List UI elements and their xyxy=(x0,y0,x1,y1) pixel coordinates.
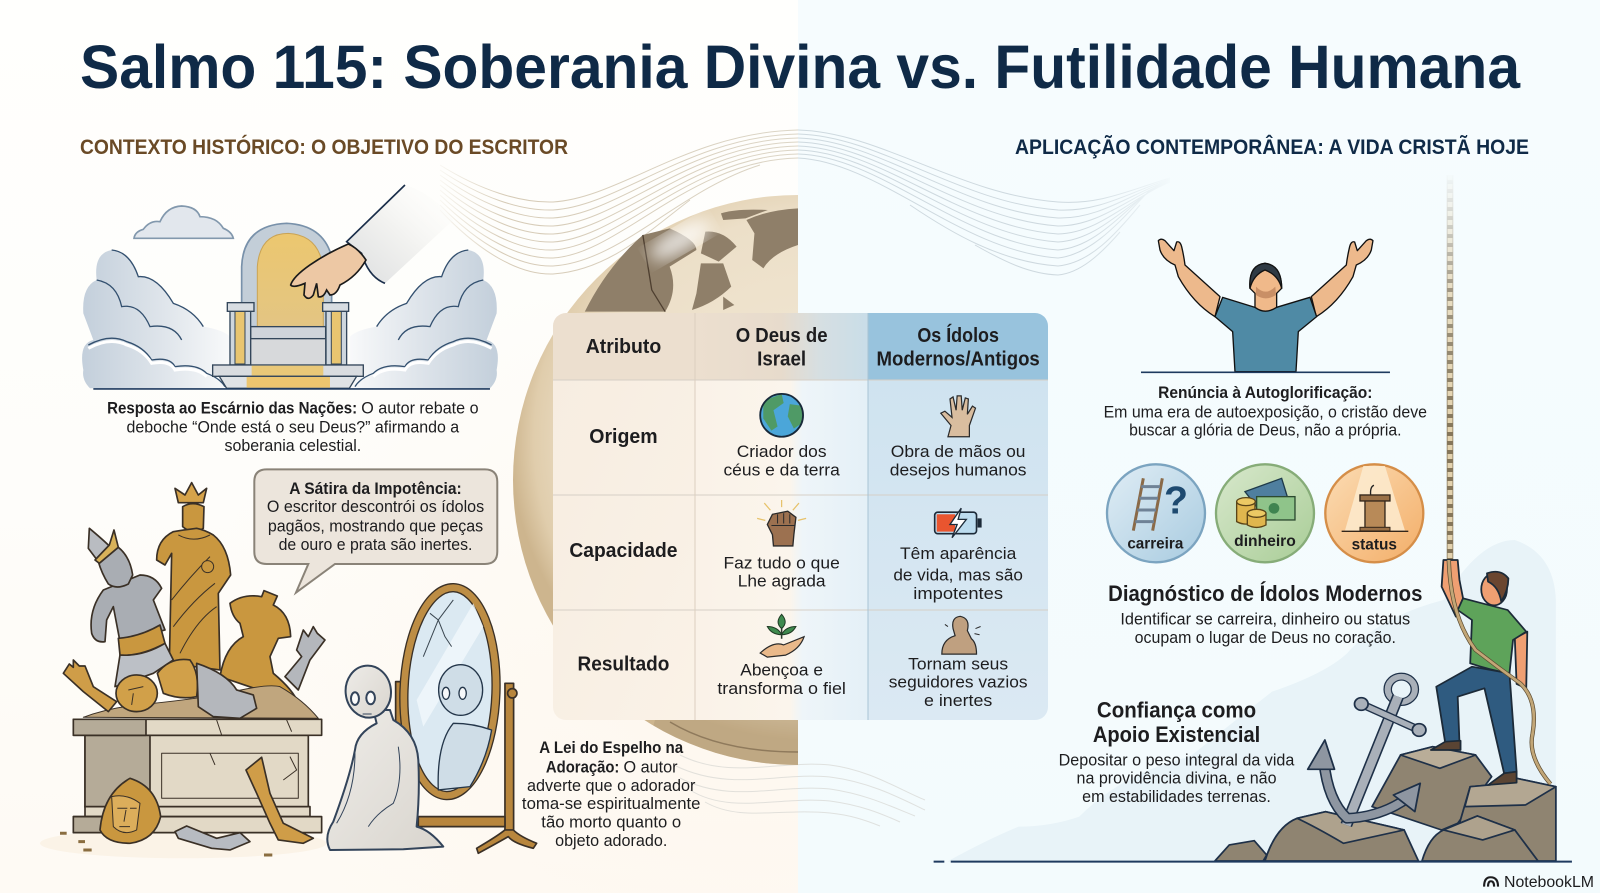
icon: idol hand xyxy=(941,396,976,437)
text: resposta ao escarnio: deboche “Onde está o seu Deus?” afirmando a xyxy=(127,419,460,437)
bubble text: O escritor descontrói os ídolos xyxy=(267,498,484,516)
left arm xyxy=(1158,239,1220,317)
comparison table: desejos humanos xyxy=(890,462,1027,480)
headless gold torso xyxy=(220,591,298,703)
circle: carreira: carreira xyxy=(1127,535,1184,552)
throne xyxy=(213,223,363,388)
globe lower shading xyxy=(654,720,798,765)
comparison table: Obra de mãos ou xyxy=(891,443,1026,461)
icon: low battery xyxy=(935,508,982,538)
circle: dinheiro xyxy=(1216,464,1314,562)
head and neck xyxy=(1250,263,1282,311)
text: diagnostico de idolos modernos: ocupam o lugar de Deus no coração. xyxy=(1135,629,1396,647)
comparison table xyxy=(553,313,1048,720)
globe continents xyxy=(585,208,798,312)
circle: dinheiro: dinheiro xyxy=(1234,533,1296,550)
text: confianca como apoio existencial: em estabilidades terrenas. xyxy=(1082,788,1271,806)
text: lei do espelho: objeto adorado. xyxy=(555,832,667,850)
text: lei do espelho xyxy=(522,739,701,850)
comparison table: Criador dos xyxy=(737,443,827,461)
comparison table: impotentes xyxy=(913,585,1003,603)
ground shadow xyxy=(40,828,327,858)
text: confianca como apoio existencial: Apoio Existencial xyxy=(1093,722,1260,747)
fallen gold arm xyxy=(246,757,313,843)
right clouds xyxy=(350,250,498,388)
rope xyxy=(1447,175,1453,570)
table header: deus de israel: O Deus de xyxy=(736,325,828,347)
mirror frame and glass xyxy=(400,586,500,797)
comparison table: Faz tudo o que xyxy=(723,554,840,572)
text: lei do espelho: toma-se espiritualmente xyxy=(522,795,701,813)
text: renuncia a autoglorificacao: buscar a glória de Deus, não a própria. xyxy=(1129,422,1402,440)
silver statue xyxy=(88,528,173,687)
table header: idolos: Modernos/Antigos xyxy=(877,348,1040,370)
table header: atributo: Atributo xyxy=(586,336,661,358)
silver arm right xyxy=(285,627,325,690)
text: resposta ao escarnio: O autor rebate o xyxy=(361,399,479,417)
text: renuncia a autoglorificacao xyxy=(1104,384,1427,440)
climber xyxy=(1431,560,1527,785)
fallen statue xyxy=(116,659,257,718)
background: cool right half xyxy=(798,0,1600,893)
icon: earth xyxy=(760,394,806,437)
comparison table: seguidores vazios xyxy=(889,674,1028,692)
text: renuncia a autoglorificacao: Renúncia à Autoglorificação: xyxy=(1158,384,1372,402)
comparison table: Têm aparência xyxy=(900,545,1017,563)
right arm xyxy=(1311,239,1373,317)
rocks xyxy=(1215,747,1556,861)
icon: plant in hand xyxy=(760,614,804,657)
globe half xyxy=(513,195,798,765)
comparison table: Lhe agrada xyxy=(738,573,826,591)
text: confianca como apoio existencial: na providência divina, e não xyxy=(1077,770,1277,788)
background blob: pale blue hill xyxy=(947,540,1556,862)
speech bubble: a satira da impotencia xyxy=(254,469,497,593)
ground line xyxy=(951,859,1572,865)
comparison table: de vida, mas são xyxy=(893,567,1023,585)
small cloud xyxy=(134,206,233,238)
shirt xyxy=(1215,297,1317,372)
reflection figure xyxy=(438,665,492,790)
comparison table: céus e da terra xyxy=(723,462,841,480)
illustration: mirror and kneeling figure xyxy=(327,586,537,853)
fallen head on floor xyxy=(100,778,161,843)
background: peach glow xyxy=(0,300,798,893)
rubble pebbles xyxy=(60,833,272,855)
text: confianca como apoio existencial xyxy=(1059,697,1295,806)
gold arm left xyxy=(63,660,117,712)
rubble mound xyxy=(83,686,318,718)
background: warm left half xyxy=(0,0,798,893)
text: lei do espelho: A Lei do Espelho na xyxy=(539,739,684,757)
decorative waves left xyxy=(440,130,798,274)
logo: NotebookLM: NotebookLM xyxy=(1504,874,1594,891)
hair xyxy=(1250,263,1282,288)
table cell backgrounds xyxy=(553,313,1048,720)
text: lei do espelho: O autor xyxy=(623,758,678,776)
bubble text: A Sátira da Impotência: xyxy=(289,480,462,498)
standing gold statue xyxy=(157,483,231,670)
ground dash xyxy=(934,859,944,865)
row label: capacidade: Capacidade xyxy=(569,540,678,562)
hand and sleeve xyxy=(291,185,453,298)
text: diagnostico de idolos modernos: Diagnóstico de Ídolos Modernos xyxy=(1108,581,1422,606)
heading: left column: CONTEXTO HISTÓRICO: O OBJETIVO DO ESCRITOR xyxy=(80,135,568,159)
text: renuncia a autoglorificacao: Em uma era de autoexposição, o cristão deve xyxy=(1104,403,1427,421)
bubble text: pagãos, mostrando que peças xyxy=(268,518,483,536)
icon: raised fist xyxy=(757,500,806,546)
row label: resultado: Resultado xyxy=(578,653,669,675)
mirror stand xyxy=(396,682,537,853)
plinth xyxy=(73,719,322,833)
comparison table: transforma o fiel xyxy=(717,680,846,698)
circle: status xyxy=(1325,464,1423,562)
circle: status: status xyxy=(1352,536,1397,553)
decorative waves bottom xyxy=(676,755,925,826)
globe highlight xyxy=(645,213,715,267)
table header: deus de israel: Israel xyxy=(757,348,806,370)
table header: deus de israel xyxy=(736,325,828,370)
ground line xyxy=(1141,370,1390,375)
text: diagnostico de idolos modernos: Identificar se carreira, dinheiro ou status xyxy=(1120,610,1410,628)
text: lei do espelho: tão morto quanto o xyxy=(541,814,681,832)
comparison table: Abençoa e xyxy=(740,662,823,680)
bubble text: de ouro e prata são inertes. xyxy=(279,536,472,554)
heading: right column: APLICAÇÃO CONTEMPORÂNEA: A VIDA CRISTÃ HOJE xyxy=(1015,135,1529,159)
rope around climber xyxy=(1449,560,1551,784)
decorative waves right xyxy=(798,130,1170,275)
comparison table: e inertes xyxy=(924,692,992,710)
text: confianca como apoio existencial: Confiança como xyxy=(1097,697,1256,722)
table header: idolos xyxy=(877,324,1040,370)
text: confianca como apoio existencial: Depositar o peso integral da vida xyxy=(1059,751,1295,769)
text: resposta ao escarnio xyxy=(107,399,479,455)
kneeling figure xyxy=(327,663,443,850)
illustration: man with raised arms xyxy=(1141,239,1390,372)
chin shadow xyxy=(1256,287,1276,298)
anchor xyxy=(1308,677,1426,825)
illustration: climber, anchor and rocks xyxy=(934,560,1572,862)
fallen silver arm xyxy=(175,826,250,850)
text: diagnostico de idolos modernos xyxy=(1108,581,1422,647)
text: lei do espelho: adverte que o adorador xyxy=(527,777,696,795)
text: resposta ao escarnio: Resposta ao Escárnio das Nações: xyxy=(107,399,357,417)
icon: hollow person xyxy=(942,616,981,654)
circle: carreira: ? xyxy=(1164,478,1188,522)
text: resposta ao escarnio: soberania celestial. xyxy=(224,437,361,455)
illustration: toppled idols on a plinth xyxy=(40,483,327,858)
icon circles: modern idols xyxy=(1107,464,1423,562)
illustration: throne in the clouds with divine hand xyxy=(82,185,498,389)
comparison table: Tornam seus xyxy=(908,655,1008,673)
circle: carreira xyxy=(1107,464,1205,562)
ground line xyxy=(93,386,490,391)
table header: idolos: Os Ídolos xyxy=(917,324,999,347)
bubble text xyxy=(267,480,484,554)
text: lei do espelho: Adoração: xyxy=(546,758,619,776)
row label: origem: Origem xyxy=(589,426,658,448)
title: Salmo 115: Soberania Divina vs. Futilidade Humana xyxy=(80,33,1521,101)
left clouds xyxy=(82,250,230,388)
